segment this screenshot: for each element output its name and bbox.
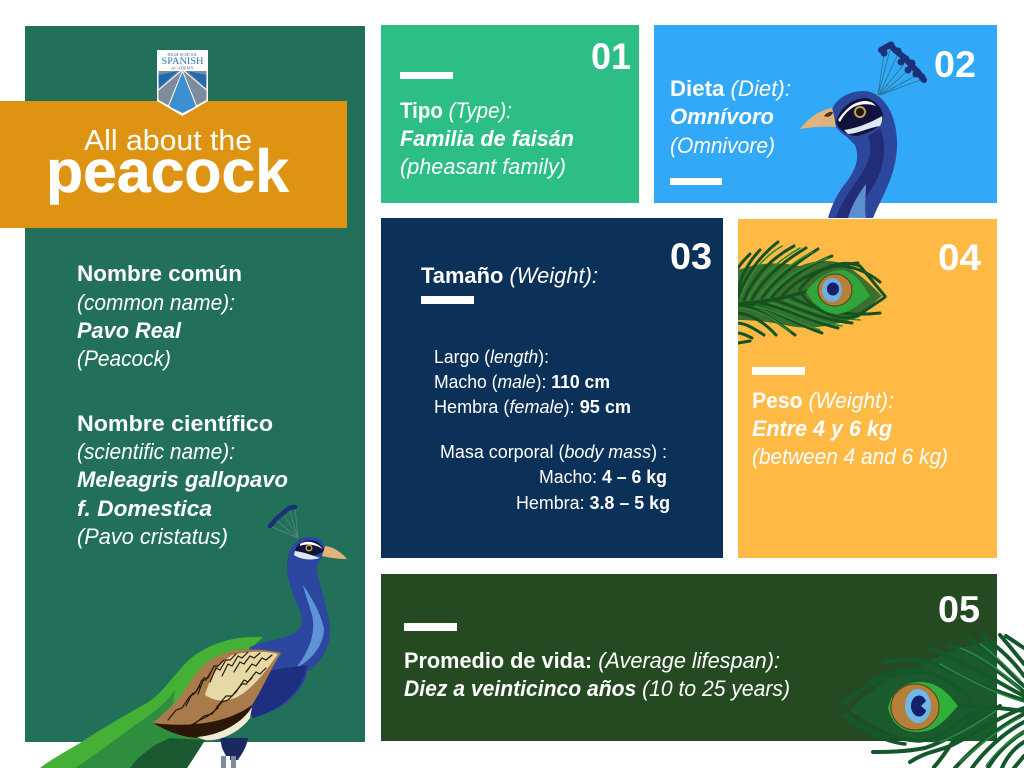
panel 03: size	[381, 218, 723, 558]
panel 05: lifespan	[381, 574, 997, 741]
text: length: Largo (length):	[434, 346, 549, 367]
icon: Spanish academy shield logo: HIGH SCHOOL	[167, 52, 198, 57]
text: weight: Entre 4 y 6 kg	[752, 416, 893, 441]
text: body mass: Macho: 4 – 6 kg	[539, 466, 667, 487]
text: weight	[752, 388, 948, 469]
text: diet: Dieta (Diet):	[670, 76, 791, 101]
icon: Spanish academy shield logo	[157, 50, 208, 116]
text block: common name: (Peacock)	[77, 346, 171, 371]
text block: scientific name: Meleagris gallopavo	[77, 467, 288, 492]
panel 02: diet	[654, 25, 997, 218]
text block: scientific name	[77, 411, 288, 549]
text block: common name: Nombre común	[77, 261, 242, 286]
icon: full peacock illustration	[40, 507, 347, 768]
tail	[40, 637, 263, 768]
panel 04: weight	[738, 219, 997, 558]
panel 03: size: 03	[670, 236, 712, 277]
panel 05: lifespan: 05	[938, 589, 980, 630]
text: length: Macho (male): 110 cm	[434, 371, 610, 392]
text: diet: Omnívoro	[670, 104, 774, 129]
text: body mass: Masa corporal (body mass) :	[440, 441, 667, 462]
text: length: Hembra (female): 95 cm	[434, 396, 631, 417]
text: body mass	[440, 441, 670, 513]
text: type: Tipo (Type):	[400, 98, 512, 123]
neck and body	[243, 537, 330, 718]
text: lifespan	[404, 648, 790, 701]
icon: Spanish academy shield logo: SPANISH	[162, 56, 204, 66]
text: size heading: Tamaño (Weight):	[421, 263, 598, 288]
text block: common name	[77, 261, 242, 371]
text: type: Familia de faisán	[400, 126, 574, 151]
title: all about the peacock: peacock	[46, 138, 290, 205]
crest	[272, 508, 298, 538]
text: diet	[670, 76, 791, 158]
text: weight: (between 4 and 6 kg)	[752, 444, 948, 469]
panel 01: type: 01	[591, 36, 631, 77]
text: lifespan: Promedio de vida: (Average lifespan):	[404, 648, 780, 673]
icon: peacock feather	[738, 242, 885, 343]
text block: common name: Pavo Real	[77, 318, 182, 343]
text: lifespan: Diez a veinticinco años (10 to 25 years)	[404, 676, 790, 701]
text: weight: Peso (Weight):	[752, 388, 894, 413]
text: type	[400, 98, 574, 179]
icon: large peacock feather	[843, 635, 1024, 768]
beak	[322, 546, 347, 559]
text: type: (pheasant family)	[400, 154, 566, 179]
panel 02: diet: 02	[934, 44, 976, 85]
text block: scientific name: (scientific name):	[77, 439, 235, 464]
text block: scientific name: Nombre científico	[77, 411, 273, 436]
head	[295, 540, 325, 556]
title banner	[0, 101, 347, 228]
text: body mass: Hembra: 3.8 – 5 kg	[516, 492, 670, 513]
text block: scientific name: f. Domestica	[77, 496, 212, 521]
panel 04: weight: 04	[938, 237, 981, 278]
text block: common name: (common name):	[77, 290, 235, 315]
panel 01: type	[381, 25, 639, 203]
icon: Spanish academy shield logo: ACADEMY	[171, 66, 195, 70]
text: diet: (Omnivore)	[670, 133, 775, 158]
panel: identity sidebar	[0, 26, 365, 742]
text block: scientific name: (Pavo cristatus)	[77, 524, 228, 549]
text: length	[434, 346, 631, 417]
wing	[153, 650, 281, 738]
title: all about the peacock: All about the	[84, 125, 252, 157]
legs	[220, 738, 248, 760]
icon: peacock head	[800, 42, 927, 218]
